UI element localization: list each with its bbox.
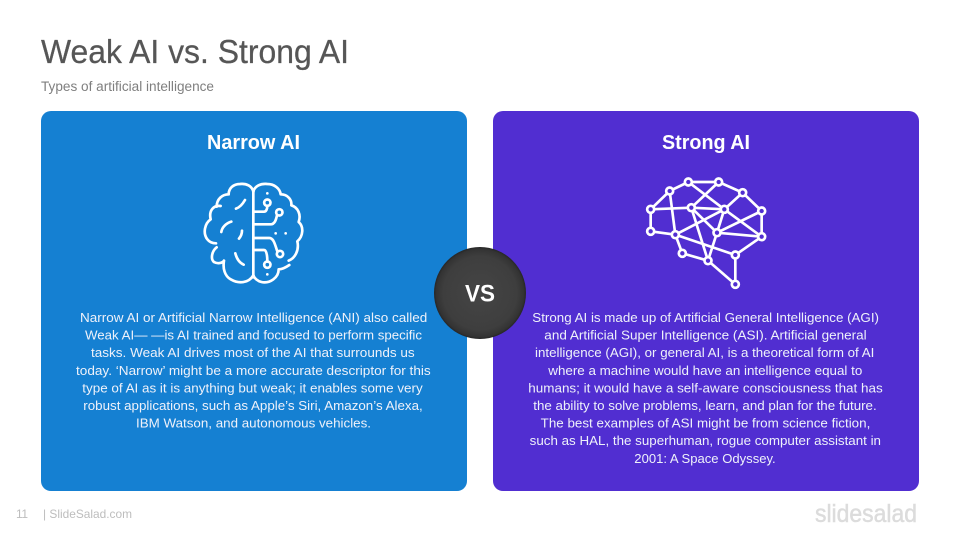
body text: Strong AI: such as HAL, the superhuman, rogue computer assistant in [530,433,881,448]
footer: site name: | SlideSalad.com [43,507,132,521]
page number: 11 [16,507,28,521]
icon: brain with circuits [205,184,302,282]
body text: Narrow AI: type of AI as it is anything but weak; it enables some very [82,380,423,395]
body text: Strong AI: the ability to solve problems, learn, and plan for the future. [533,398,877,413]
heading: Strong AI: Strong AI [662,132,750,154]
body text: Narrow AI: tasks. Weak AI drives most of the AI that surrounds us [91,345,415,360]
body text: Narrow AI: robust applications, such as Apple’s Siri, Amazon’s Alexa, [83,398,423,413]
body text: Strong AI: and Artificial Super Intelligence (ASI). Artificial general [544,328,867,343]
body text: Strong AI: Strong AI is made up of Artificial General Intelligence (AGI) [532,310,879,325]
body text: Strong AI: humans; it would have a self-aware consciousness that has [528,380,883,395]
body text: Strong AI: The best examples of ASI might be from science fiction, [541,416,870,431]
body text: Narrow AI [76,310,431,431]
body text: Strong AI: intelligence (AGI), or general AI, is a theoretical form of AI [535,345,874,360]
panel: Strong AI [493,111,919,491]
panel: Narrow AI [41,111,467,491]
body text: Narrow AI: Narrow AI or Artificial Narrow Intelligence (ANI) also called [80,310,427,325]
title: Weak AI vs. Strong AI [41,33,349,70]
VS badge: VS [465,280,495,308]
logo: slidesalad: slidesalad [815,500,917,528]
body text: Narrow AI: Weak AI— —is AI trained and focused to perform specific [85,328,422,343]
VS badge [434,247,526,339]
icon: neural network brain [647,178,765,288]
body text: Strong AI: 2001: A Space Odyssey. [634,451,776,466]
body text: Narrow AI: today. ‘Narrow’ might be a more accurate descriptor for this [76,363,431,378]
subtitle: Types of artificial intelligence [41,79,214,94]
heading: Narrow AI: Narrow AI [207,132,300,154]
body text: Strong AI [528,310,883,466]
body text: Narrow AI: IBM Watson, and autonomous vehicles. [136,416,371,431]
body text: Strong AI: where a machine would have an intelligence equal to [547,363,862,378]
